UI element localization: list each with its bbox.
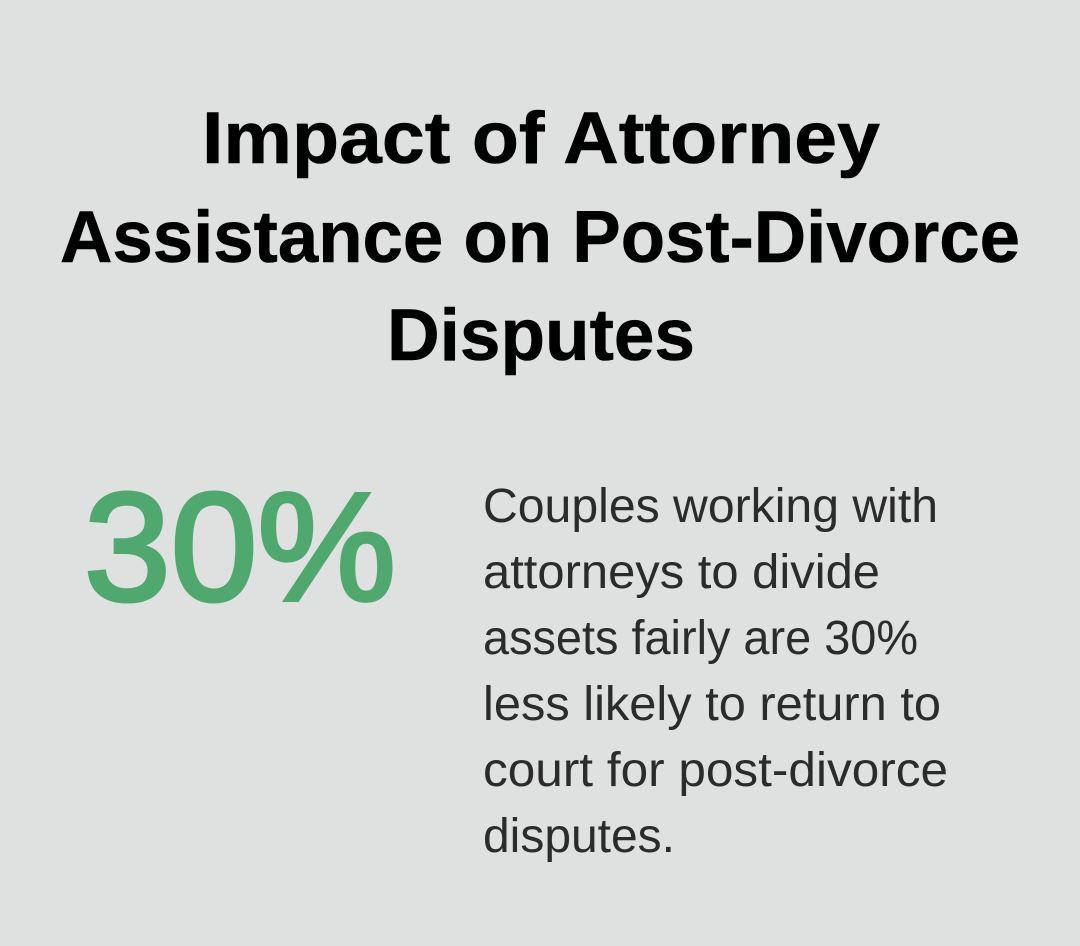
description text: less likely to return to — [483, 678, 941, 731]
description text: disputes. — [483, 810, 675, 863]
title — [60, 98, 1020, 376]
big statistic: 30%: 30% — [84, 461, 396, 633]
description text: Couples working with — [483, 480, 938, 533]
description text — [483, 480, 948, 863]
title: Impact of Attorney — [202, 98, 880, 179]
description text: attorneys to divide — [483, 546, 880, 599]
title: Assistance on Post-Divorce — [60, 197, 1020, 278]
description text: court for post-divorce — [483, 744, 948, 797]
title: Disputes — [387, 295, 695, 376]
description text: assets fairly are 30% — [483, 612, 918, 665]
